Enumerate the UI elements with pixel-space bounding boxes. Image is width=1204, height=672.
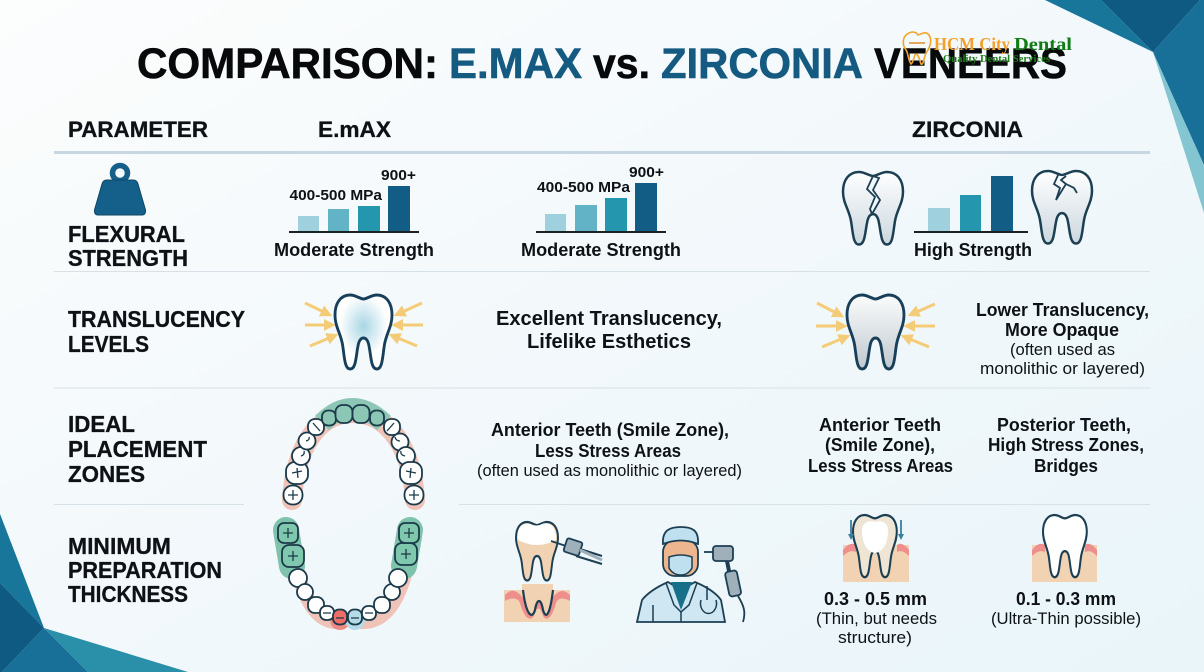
text: zirconia prep thickness: structure) — [838, 628, 912, 647]
title: COMPARISON: — [137, 40, 438, 88]
title: E.MAX — [449, 40, 582, 88]
icon: fractured tooth right — [1032, 171, 1092, 244]
text: E.max translucency — [496, 307, 722, 353]
bar chart: zirconia strength — [914, 176, 1032, 260]
parameter labels: STRENGTH — [68, 245, 188, 271]
text: anterior zones: (Smile Zone), — [825, 435, 935, 455]
icon: translucent tooth with light arrows — [305, 295, 423, 369]
decoration: top right corner — [1045, 0, 1204, 213]
text: E.max placement zones: Anterior Teeth (Smile Zone), — [491, 420, 729, 440]
text: anterior zones: Less Stress Areas — [808, 456, 953, 476]
parameter labels: LEVELS — [68, 331, 149, 357]
icon: fractured tooth left — [843, 172, 903, 245]
icon: weight — [94, 166, 146, 215]
table header: PARAMETER — [68, 117, 208, 142]
text: zirconia translucency — [976, 300, 1149, 378]
text: zirconia translucency: (often used as — [1010, 340, 1115, 359]
table header: ZIRCONIA — [912, 117, 1023, 142]
parameter labels: FLEXURAL — [68, 221, 185, 247]
parameter labels: PLACEMENT — [68, 436, 207, 462]
text: zirconia translucency: monolithic or layered) — [980, 359, 1145, 378]
icon: tooth preparation with drill — [504, 522, 602, 622]
text: anterior zones: Anterior Teeth — [819, 415, 941, 435]
text: E.max placement zones: Less Stress Areas — [535, 441, 681, 461]
icon: dentist with handpiece — [637, 527, 744, 622]
text: zirconia translucency: Lower Translucency, — [976, 300, 1149, 320]
diagram: upper dental arch — [284, 405, 424, 504]
text: zirconia translucency: More Opaque — [1005, 320, 1119, 340]
bar chart: zirconia strength: High Strength — [914, 239, 1032, 260]
decoration: bottom left corner — [0, 514, 188, 672]
icon: zirconia prep tooth with arrows — [843, 515, 909, 582]
title: ZIRCONIA — [661, 40, 863, 88]
bar chart: E.max strength: 400-500 MPa — [290, 187, 383, 204]
table header: E.mAX — [318, 117, 391, 142]
parameter labels: ZONES — [68, 461, 145, 487]
bar chart: E.max strength — [274, 167, 434, 260]
title: vs. — [593, 40, 650, 88]
text: zirconia prep thickness: 0.3 - 0.5 mm — [824, 589, 927, 609]
bar chart: middle column strength: Moderate Strength — [521, 239, 681, 260]
table rules — [54, 151, 1150, 505]
text: ultra-thin thickness: (Ultra-Thin possible) — [991, 609, 1141, 628]
text: ultra-thin thickness: 0.1 - 0.3 mm — [1016, 589, 1116, 609]
text: E.max placement zones — [477, 420, 742, 480]
text: E.max translucency: Excellent Translucency, — [496, 307, 722, 330]
text: posterior zones — [988, 415, 1144, 476]
parameter labels: PREPARATION — [68, 557, 222, 583]
text: E.max placement zones: (often used as monolithic or layered) — [477, 461, 742, 480]
text: posterior zones: Bridges — [1034, 456, 1098, 476]
title: VENEERS — [874, 40, 1067, 88]
diagram: lower dental arch — [278, 523, 419, 630]
bar chart: E.max strength: 900+ — [381, 167, 416, 184]
logo watermark: HCM City — [934, 34, 1010, 54]
bar chart: middle column strength: 400-500 MPa — [537, 179, 631, 196]
parameter labels: MINIMUM — [68, 533, 171, 559]
text: ultra-thin thickness — [991, 589, 1141, 628]
title — [137, 40, 1067, 88]
parameter labels: IDEAL — [68, 411, 135, 437]
logo watermark: Quality Dental Services — [943, 54, 1050, 65]
parameter labels: TRANSLUCENCY — [68, 306, 245, 332]
icon: opaque tooth with light arrows — [816, 295, 935, 369]
text: E.max translucency: Lifelike Esthetics — [527, 330, 691, 353]
text: zirconia prep thickness — [816, 589, 937, 647]
bar chart: E.max strength: Moderate Strength — [274, 239, 434, 260]
icon: ultra-thin prep tooth — [1032, 515, 1097, 582]
table header — [68, 117, 1023, 142]
parameter labels: THICKNESS — [68, 581, 188, 607]
parameter labels — [68, 221, 245, 607]
logo watermark: Dental — [1014, 34, 1072, 54]
text: posterior zones: Posterior Teeth, — [997, 415, 1131, 435]
text: zirconia prep thickness: (Thin, but needs — [816, 609, 937, 628]
text: anterior zones — [808, 415, 953, 476]
bar chart: middle column strength — [521, 164, 681, 260]
text: posterior zones: High Stress Zones, — [988, 435, 1144, 455]
bar chart: middle column strength: 900+ — [629, 164, 664, 181]
logo watermark — [903, 32, 1072, 65]
